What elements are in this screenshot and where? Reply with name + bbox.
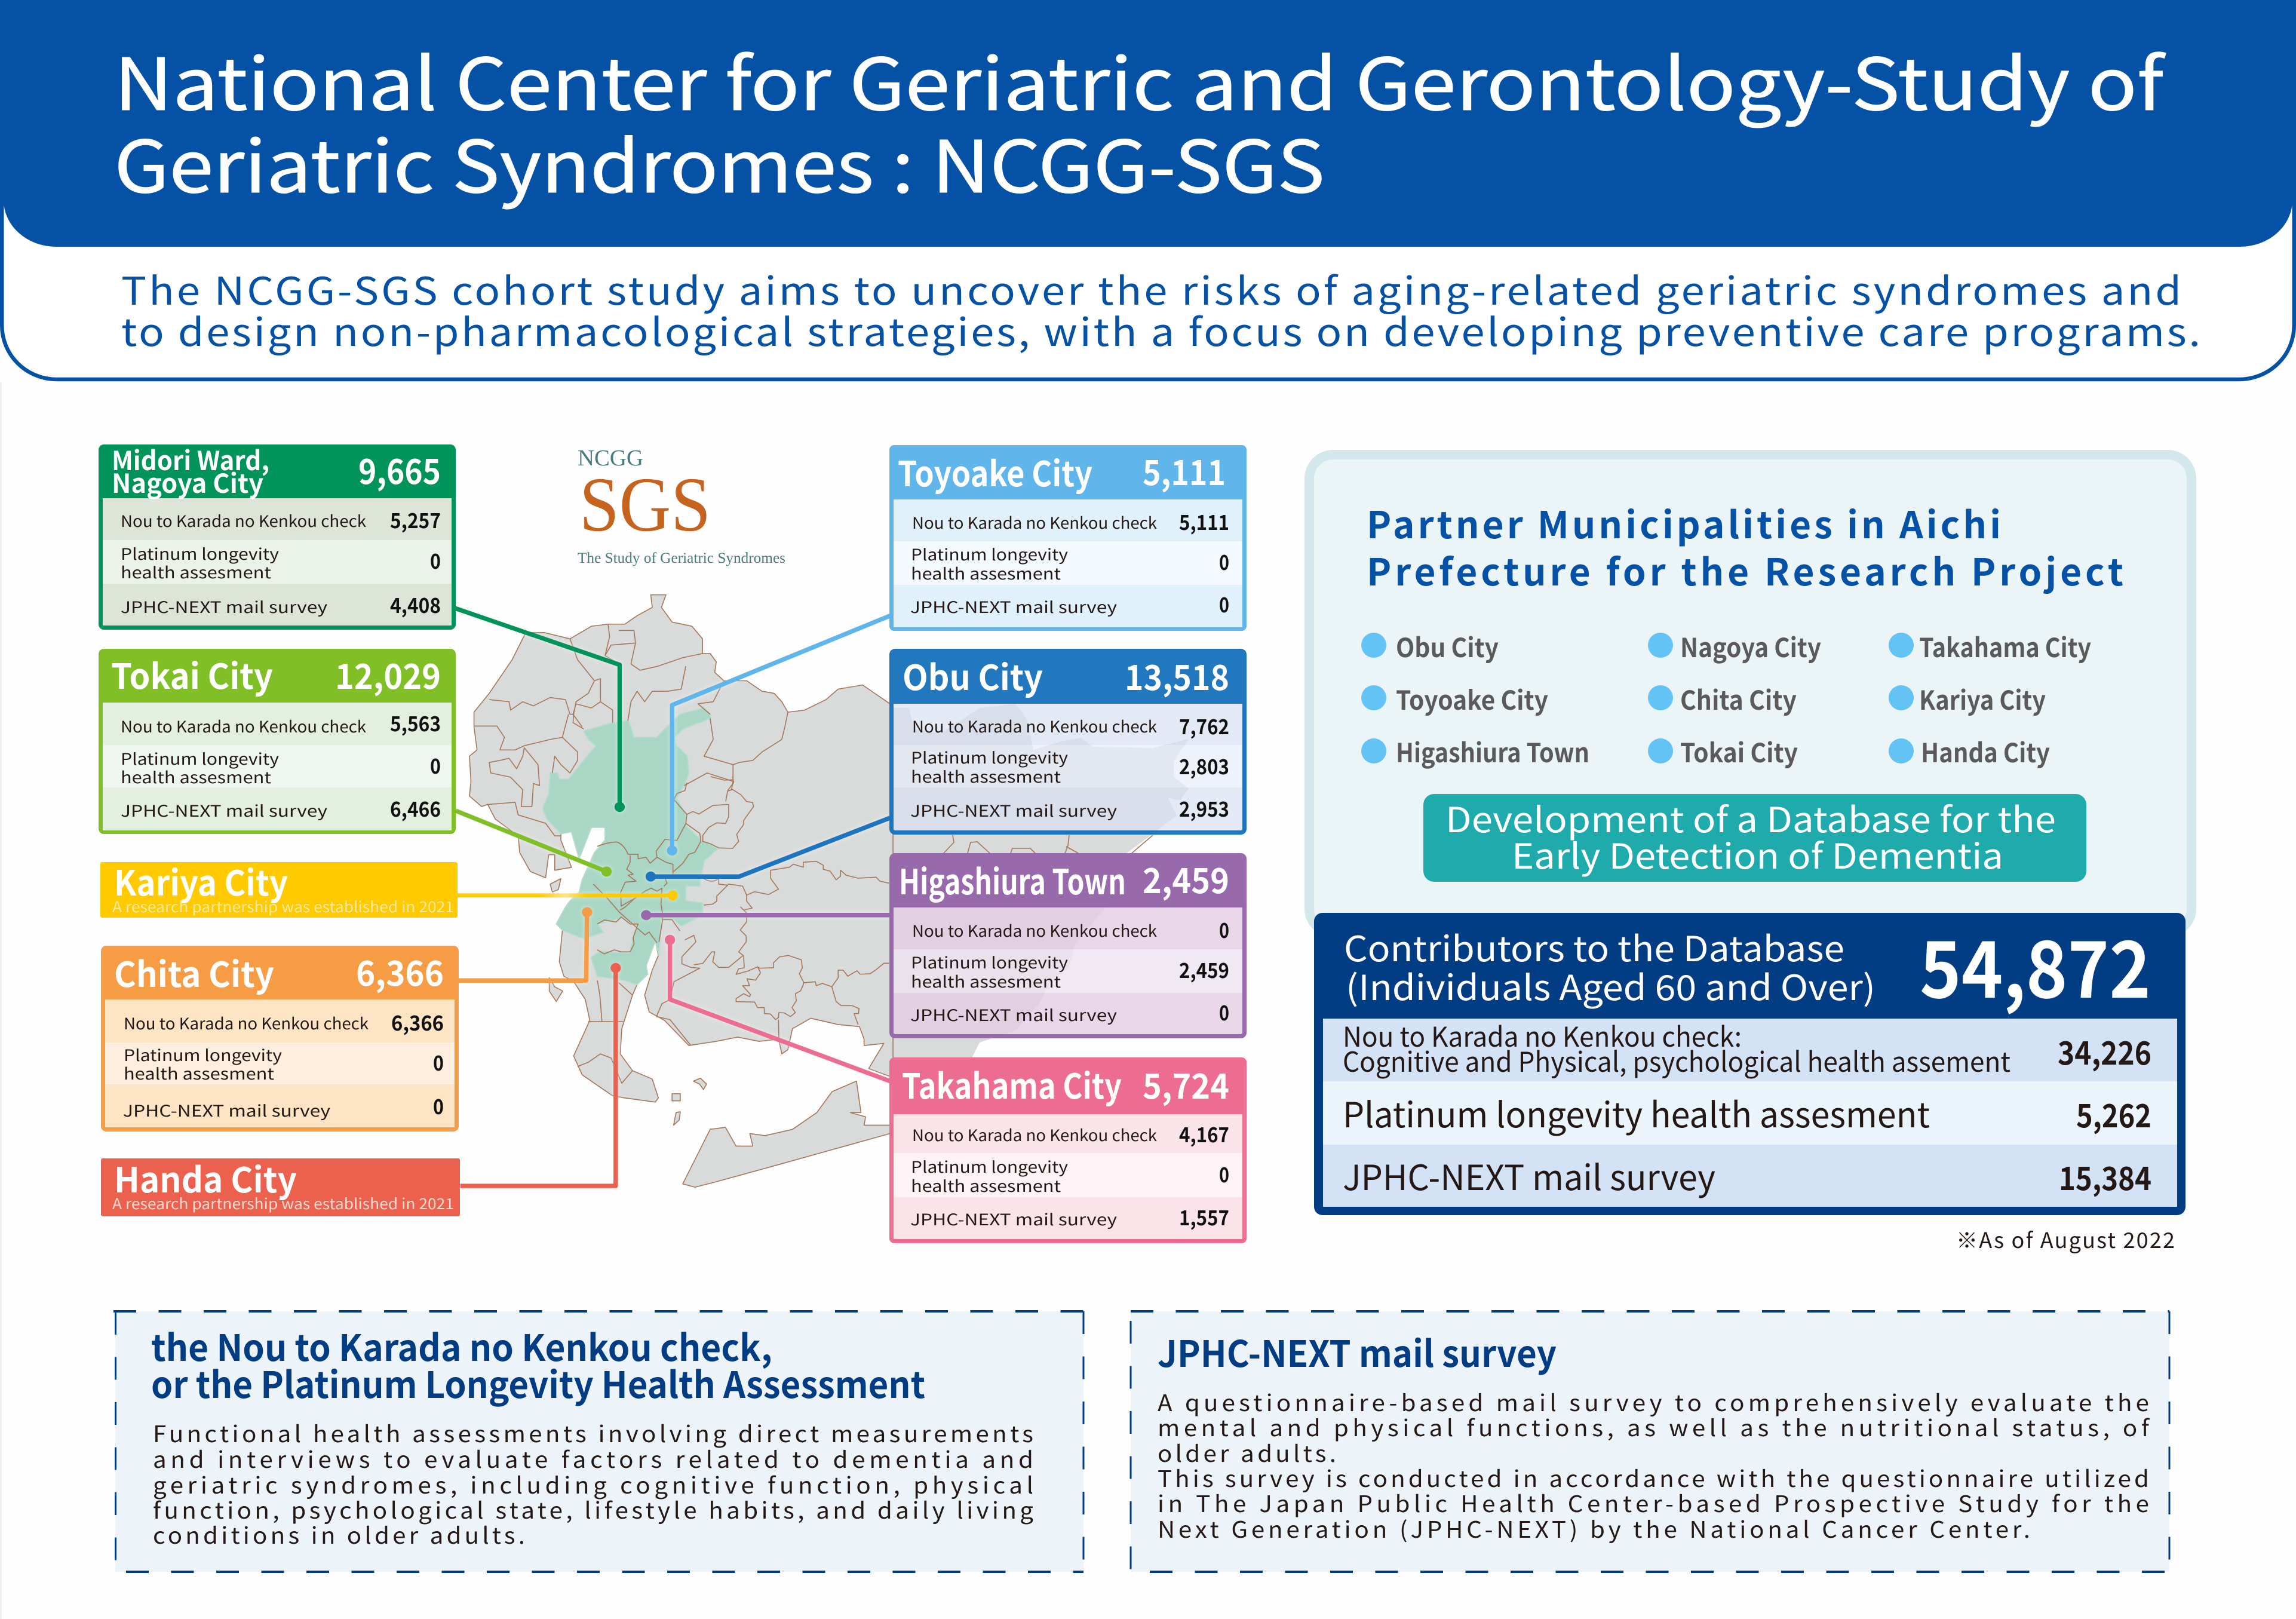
panel: Tokai City: 6,466: [390, 793, 441, 823]
municipality list: Kariya City: [1919, 679, 2046, 717]
body: health check: and interviews to evaluate factors related to dementia and: [153, 1442, 1033, 1475]
panel: Toyoake City: JPHC-NEXT mail survey: [910, 594, 1117, 618]
panel: Higashiura Town: [891, 853, 1245, 1036]
panel: Chita City: JPHC-NEXT mail survey: [123, 1098, 330, 1121]
panel: Handa City: [101, 1152, 460, 1216]
panel: Takahama City: Nou to Karada no Kenkou check: [912, 1123, 1157, 1146]
contributors rows: [1343, 1016, 2151, 1200]
leader lines: [456, 616, 890, 1186]
municipality list: Chita City: [1680, 679, 1797, 717]
panel: Higashiura Town: Nou to Karada no Kenkou check: [912, 918, 1157, 942]
panel: Midori Ward, Nagoya City: 5,257: [390, 504, 441, 535]
logo: NCGG SGS: [578, 446, 785, 566]
contributors rows: JPHC-NEXT mail survey: [1343, 1150, 1715, 1200]
contributors rows: Nou to Karada no Kenkou check:: [1343, 1016, 1742, 1055]
body: mail survey: mental and physical functions, as well as the nutritional status, of: [1158, 1411, 2150, 1443]
municipality list: Takahama City: [1919, 627, 2091, 665]
panel: Chita City: Platinum longevity: [124, 1042, 282, 1066]
contributors total: 54,872: [1920, 907, 2151, 1020]
municipality list: [1361, 627, 2091, 770]
body: health check: function, psychological state, lifestyle habits, and daily living: [153, 1493, 1033, 1526]
panel: Obu City: Nou to Karada no Kenkou check: [912, 714, 1157, 737]
heading: partner municipalities: Partner Municipalities in Aichi: [1367, 495, 2001, 549]
body: mail survey: older adults.: [1158, 1436, 1336, 1469]
panel: Tokai City: [99, 649, 456, 834]
subtitle text: The NCGG-SGS cohort study aims to uncover the risks of aging-related geriatric syndromes and: [121, 261, 2181, 316]
panel: Tokai City: Platinum longevity: [121, 746, 279, 769]
panel: contributors to the database: [1314, 907, 2186, 1215]
body: health check: [153, 1416, 1033, 1551]
panel: Obu City: 2,803: [1179, 750, 1229, 781]
contributors heading: Contributors to the Database: [1344, 921, 1844, 971]
panel: Takahama City: 1,557: [1179, 1201, 1229, 1232]
leader line: Obu City: [646, 818, 890, 882]
logo: NCGG SGS: NCGG: [578, 446, 643, 471]
logo: NCGG SGS: The Study of Geriatric Syndromes: [578, 550, 785, 566]
contributors rows: Platinum longevity health assesment: [1343, 1087, 1930, 1137]
panel: Toyoake City: 0: [1219, 588, 1229, 619]
leader line: Takahama City: [665, 935, 890, 1081]
body: mail survey: [1158, 1385, 2150, 1545]
leader line: Handa City: [461, 963, 621, 1186]
title: [114, 27, 2166, 213]
logo: NCGG SGS: SGS: [579, 462, 711, 548]
panel: Tokai City: Nou to Karada no Kenkou check: [121, 714, 366, 737]
panel: Toyoake City: Platinum longevity: [911, 542, 1068, 565]
municipality list: Obu City: [1396, 627, 1499, 665]
panel: Chita City: health assesment: [124, 1061, 274, 1084]
panel: Midori Ward, Nagoya City: Nagoya City: [112, 462, 263, 501]
panel: Takahama City: Platinum longevity: [911, 1154, 1068, 1178]
heading: health check: the Nou to Karada no Kenkou check,: [151, 1318, 772, 1372]
panel: Takahama City: JPHC-NEXT mail survey: [910, 1207, 1117, 1230]
panel: Higashiura Town: 2,459: [1143, 853, 1229, 903]
panel: Midori Ward, Nagoya City: JPHC-NEXT mail survey: [121, 594, 327, 618]
panel: partner municipalities: [1309, 455, 2191, 933]
panel: Toyoake City: 0: [1219, 546, 1229, 577]
panel: Higashiura Town: JPHC-NEXT mail survey: [910, 1002, 1117, 1026]
panel: Obu City: 2,953: [1179, 793, 1229, 823]
contributors rows: Cognitive and Physical, psychological health assement: [1343, 1041, 2010, 1080]
panel: Toyoake City: [889, 445, 1247, 631]
panel: Toyoake City: 5,111: [1179, 506, 1229, 536]
contributors rows: 34,226: [2058, 1027, 2151, 1074]
panel: Obu City: Obu City: [903, 650, 1043, 700]
panel: Chita City: [101, 946, 459, 1132]
panel: health check explanation: [113, 1311, 1083, 1572]
panel: Midori Ward, Nagoya City: health assesment: [121, 560, 271, 583]
panel: Higashiura Town: health assesment: [911, 969, 1061, 992]
contributors heading: [1344, 921, 1876, 1010]
panel: Obu City: health assesment: [911, 764, 1061, 787]
title banner: [0, 0, 2296, 247]
leader line: Higashiura Town: [641, 910, 890, 920]
panel: Obu City: JPHC-NEXT mail survey: [910, 798, 1117, 821]
footnote: ※As of August 2022: [1956, 1224, 2175, 1255]
panel: Midori Ward, Nagoya City: Nou to Karada no Kenkou check: [121, 508, 366, 532]
panel: Midori Ward, Nagoya City: Midori Ward,: [112, 440, 269, 478]
municipality list: Tokai City: [1680, 732, 1798, 770]
panel: Obu City: 7,762: [1179, 710, 1229, 741]
panel: Kariya City: Kariya City: [114, 856, 288, 906]
body: mail survey: A questionnaire-based mail survey to comprehensively evaluate the: [1158, 1385, 2149, 1418]
panel: Tokai City: JPHC-NEXT mail survey: [121, 798, 327, 821]
leader line: Midori Ward: [453, 608, 625, 812]
panel: Tokai City: 12,029: [335, 649, 441, 699]
panel: Toyoake City: Nou to Karada no Kenkou check: [912, 510, 1157, 533]
panel: Midori Ward, Nagoya City: 4,408: [390, 589, 441, 620]
panel: Higashiura Town: Higashiura Town: [899, 854, 1126, 904]
teal banner: database: [1423, 792, 2086, 882]
panel: Midori Ward, Nagoya City: 0: [430, 545, 441, 575]
contributors heading: (Individuals Aged 60 and Over): [1346, 960, 1876, 1010]
municipality list: Toyoake City: [1396, 679, 1548, 717]
body: health check: geriatric syndromes, including cognitive function, physical: [153, 1468, 1033, 1501]
body: health check: conditions in older adults.: [153, 1518, 525, 1551]
panel: Chita City: Chita City: [114, 947, 274, 997]
municipal boundaries: central and eastern detail: [593, 777, 889, 1045]
panel: Kariya City: A research partnership was established in 2021: [112, 896, 454, 917]
title: Geriatric Syndromes : NCGG-SGS: [114, 109, 1325, 213]
panel: Chita City: 6,366: [391, 1007, 444, 1037]
map land behind right-hand panels: [884, 704, 1189, 1063]
panel: Obu City: [891, 650, 1245, 833]
panel: Toyoake City: health assesment: [911, 561, 1061, 584]
panel: Takahama City: 4,167: [1179, 1118, 1229, 1149]
heading: health check: [151, 1318, 925, 1409]
panel: Chita City: Nou to Karada no Kenkou check: [124, 1011, 369, 1034]
panel: Obu City: 13,518: [1125, 650, 1229, 700]
subtitle text: [121, 261, 2200, 357]
panel: Handa City: Handa City: [114, 1152, 297, 1203]
map land: [469, 595, 893, 1187]
title: National Center for Geriatric and Gerontology-Study of: [114, 27, 2166, 131]
heading: health check: or the Platinum Longevity Health Assessment: [151, 1356, 925, 1409]
highlighted partner municipalities: [542, 708, 718, 985]
panel: Chita City: 0: [433, 1090, 444, 1121]
panel: Toyoake City: 5,111: [1143, 445, 1226, 495]
leader line: Toyoake City: [667, 616, 890, 856]
subtitle text: to design non-pharmacological strategies, with a focus on developing preventive care programs.: [121, 302, 2200, 357]
panel: Midori Ward, Nagoya City: Platinum longevity: [121, 541, 279, 565]
panel: Higashiura Town: Platinum longevity: [911, 950, 1068, 973]
panel: Kariya City: [100, 856, 458, 918]
panel: Takahama City: 0: [1219, 1158, 1229, 1189]
panel: mail survey explanation: [1131, 1311, 2169, 1572]
leader line: Tokai City: [456, 811, 612, 876]
municipality list: Higashiura Town: [1396, 732, 1589, 770]
panel: Toyoake City: Toyoake City: [898, 446, 1092, 496]
teal banner: database: Development of a Database for the: [1445, 792, 2056, 842]
heading: mail survey: JPHC-NEXT mail survey: [1158, 1324, 1557, 1378]
panel: Chita City: 0: [433, 1047, 444, 1077]
panel: Takahama City: 5,724: [1143, 1059, 1229, 1109]
panel: Obu City: Platinum longevity: [911, 745, 1068, 768]
subtitle panel: [2, 179, 2294, 379]
municipality list: Handa City: [1921, 732, 2050, 770]
body: mail survey: Next Generation (JPHC-NEXT) by the National Cancer Center.: [1158, 1512, 2030, 1545]
panel: Tokai City: 5,563: [390, 707, 441, 738]
panel: Midori Ward, Nagoya City: [99, 440, 456, 630]
heading: partner municipalities: Prefecture for the Research Project: [1367, 542, 2123, 596]
map of Aichi municipalities: [453, 595, 893, 1187]
panel: Higashiura Town: 0: [1219, 996, 1229, 1027]
contributors rows: 5,262: [2076, 1090, 2151, 1137]
panel: Higashiura Town: 2,459: [1179, 954, 1229, 985]
panel: Midori Ward, Nagoya City: 9,665: [358, 444, 441, 494]
leader line: Kariya City: [458, 890, 678, 900]
body: mail survey: in The Japan Public Health Center-based Prospective Study for the: [1158, 1486, 2149, 1519]
panel: Takahama City: [889, 1057, 1247, 1243]
municipality list: Nagoya City: [1680, 627, 1821, 665]
panel: Takahama City: Takahama City: [902, 1059, 1122, 1109]
panel: Chita City: 6,366: [356, 946, 444, 996]
body: mail survey: This survey is conducted in accordance with the questionnaire utilized: [1158, 1461, 2149, 1494]
panel: Tokai City: 0: [430, 750, 441, 780]
panel: Handa City: A research partnership was established in 2021: [112, 1192, 454, 1214]
body: health check: Functional health assessments involving direct measurements: [153, 1416, 1033, 1449]
panel: Takahama City: health assesment: [911, 1173, 1061, 1197]
panel: Tokai City: health assesment: [121, 765, 271, 788]
teal banner: database: Early Detection of Dementia: [1512, 829, 2003, 879]
municipal boundaries: [474, 624, 788, 1083]
contributors rows: 15,384: [2059, 1152, 2151, 1200]
heading: partner municipalities: [1367, 495, 2123, 596]
panel: Higashiura Town: 0: [1219, 914, 1229, 945]
panel: Tokai City: Tokai City: [111, 649, 273, 699]
leader line: Chita City: [458, 907, 593, 980]
